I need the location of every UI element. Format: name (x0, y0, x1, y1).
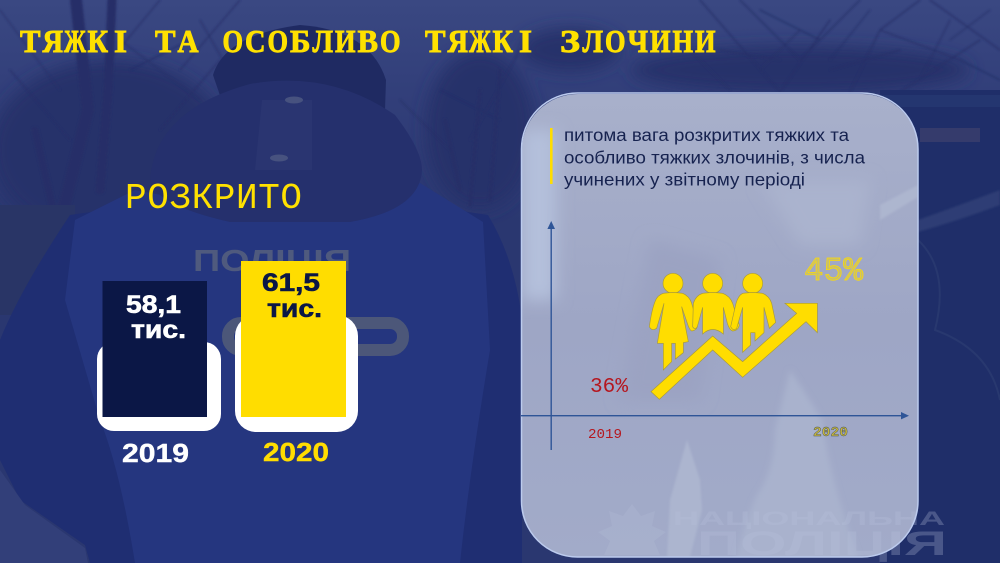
title: І (519, 23, 532, 59)
heading: РОЗКРИТО: РОЗКРИТО (125, 178, 302, 219)
value 2020: 45%: 45% (804, 253, 863, 290)
bar 2019 (97, 281, 221, 468)
hood and jacket (0, 25, 522, 563)
title: О (268, 23, 288, 59)
title: О (222, 23, 243, 59)
bar 2020: 2020 (263, 437, 329, 467)
vest print: ПОЛІЦІЯ: ПОЛІЦІЯ (193, 243, 351, 278)
value 2019: 36%: 36% (590, 376, 628, 399)
watermark: national police logo (598, 504, 947, 563)
title: И (650, 23, 671, 59)
title: И (695, 23, 716, 59)
bar 2020: 61,5 (262, 269, 320, 297)
chart axes (521, 221, 909, 450)
title: В (358, 23, 378, 59)
title: А (178, 23, 198, 59)
right officer with pixelated head (880, 90, 1000, 563)
title: Ж (64, 23, 86, 59)
title: Б (290, 23, 310, 59)
panel description: особливо тяжких злочинів, з числа (564, 148, 865, 168)
bar 2019: тис. (131, 316, 186, 344)
title: Я (448, 23, 468, 59)
title: К (88, 23, 108, 59)
title: Л (312, 23, 333, 59)
title: І (114, 23, 127, 59)
title: З (560, 23, 580, 59)
yellow accent bar (550, 128, 553, 184)
panel description: учинених у звітному періоді (564, 170, 805, 190)
axis label 2020: 2020 (813, 425, 848, 441)
bar chart: solved crimes (97, 261, 358, 468)
bar 2020: тис. (267, 295, 322, 323)
title: Т (155, 23, 176, 59)
title: К (492, 23, 513, 59)
title: Ч (628, 23, 648, 59)
title: Ж (469, 23, 491, 59)
panel: share of solved crimes (521, 93, 918, 557)
watermark: national police logo: НАЦІОНАЛЬНА (673, 509, 946, 530)
title: Л (582, 23, 603, 59)
title: С (245, 23, 266, 59)
title: Я (42, 23, 63, 59)
title: О (605, 23, 626, 59)
title: Н (672, 23, 693, 59)
title: И (335, 23, 356, 59)
watermark: national police logo: ПОЛІЦІЯ (697, 525, 947, 563)
title: Т (425, 23, 446, 59)
icon: three people over a rising arrow (649, 273, 817, 399)
axis label 2019: 2019 (588, 427, 622, 443)
title: Т (20, 23, 40, 59)
title: О (380, 23, 400, 59)
bar 2020 (235, 261, 358, 467)
bar 2019: 2019 (122, 438, 189, 468)
bar 2019: 58,1 (126, 291, 181, 319)
translucent panel fill with photo showing through (522, 94, 918, 563)
panel description: питома вага розкритих тяжких та (564, 125, 849, 145)
